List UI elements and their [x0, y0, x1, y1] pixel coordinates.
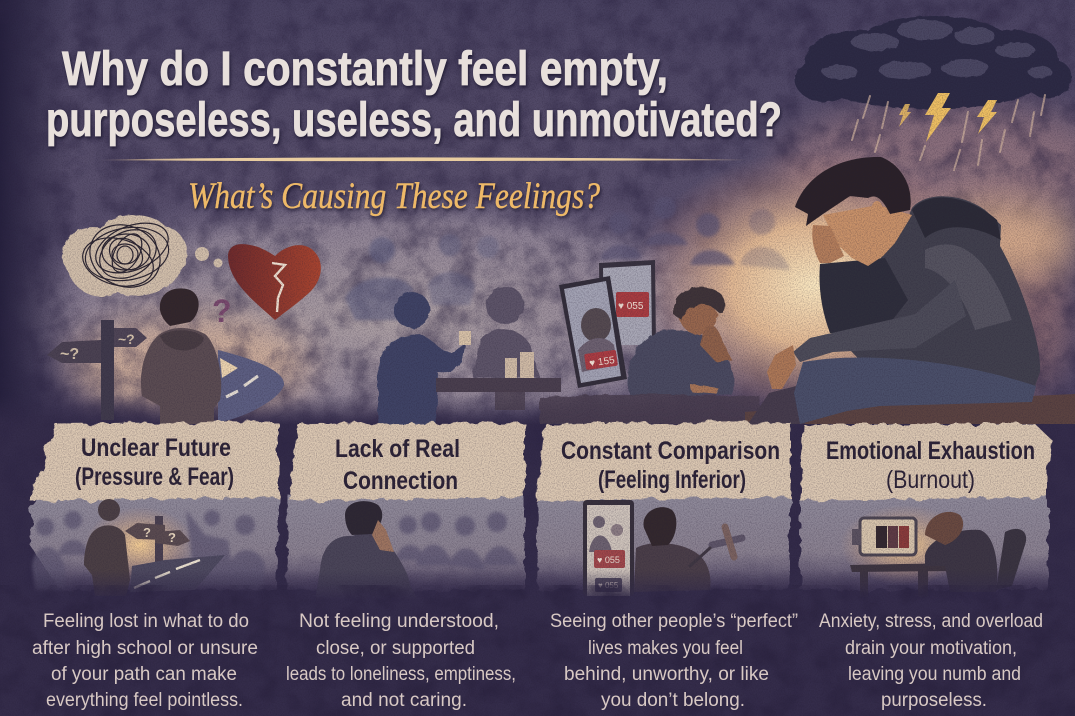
subtitle: What’s Causing These Feelings?: [188, 176, 600, 217]
panel: unclear future: [30, 422, 278, 596]
illustration: [32, 499, 265, 596]
description: emotional exhaustion: [819, 611, 1043, 711]
description: constant comparison: you don’t belong.: [601, 690, 745, 711]
panel: emotional exhaustion: [800, 424, 1052, 597]
icon: signpost: ~?: [118, 331, 135, 347]
icon: front phone: ♥ 155: [589, 355, 616, 369]
description: constant comparison: [550, 611, 798, 711]
cup: [459, 331, 471, 345]
icon: back phone: [599, 260, 656, 345]
slumped figure: [925, 512, 997, 592]
figure: woman: [472, 286, 540, 378]
heading: (Feeling Inferior): [598, 466, 746, 494]
lower arm: [793, 280, 966, 362]
icon: signpost: ~?: [60, 346, 79, 363]
heading: Unclear Future: [81, 434, 231, 462]
table: [436, 352, 561, 410]
figure: boy from behind: [141, 288, 221, 424]
chair: [996, 529, 1026, 590]
panel: comparison scene: [540, 197, 790, 424]
heading: Lack of Real: [335, 435, 460, 463]
description: unclear future: after high school or unsure: [32, 638, 258, 659]
lightning bolts: [899, 93, 997, 142]
figure: sad teen at table: [628, 287, 735, 396]
hoodie torso: [850, 196, 1040, 402]
dark band below panels: [0, 570, 1075, 716]
jeans: [794, 357, 1036, 424]
rain: [852, 95, 1045, 170]
heading: (Burnout): [886, 466, 975, 494]
description: unclear future: [32, 611, 258, 711]
panel: uncertain path scene: [47, 213, 321, 424]
description: emotional exhaustion: drain your motivation,: [845, 638, 1017, 659]
heading: [335, 435, 460, 495]
raised arm: [819, 258, 908, 336]
description: emotional exhaustion: purposeless.: [881, 690, 987, 711]
heading: [561, 437, 780, 494]
neck and face: [823, 205, 912, 266]
title: [46, 43, 782, 147]
figure: man with cup: [378, 292, 466, 425]
title: Why do I constantly feel empty,: [62, 43, 668, 96]
phone: [583, 500, 634, 596]
description: constant comparison: lives makes you feel: [588, 638, 743, 659]
card background: [287, 423, 525, 590]
description: lack of connection: and not caring.: [341, 690, 467, 711]
hood shadow: [912, 198, 1001, 240]
signpost: [125, 516, 190, 562]
ground under teen: [540, 394, 760, 424]
ear: [871, 201, 883, 221]
boot: [748, 385, 805, 424]
phone: ♥ 055: [597, 555, 620, 565]
hair: [795, 157, 911, 226]
card background: [30, 422, 278, 590]
illustration: [583, 500, 742, 596]
phone: ♥ 055: [598, 581, 619, 590]
icon: question mark: ?: [212, 293, 232, 329]
description: unclear future: Feeling lost in what to do: [43, 611, 249, 632]
shoulder highlight: [925, 244, 1012, 330]
signpost: ?: [143, 525, 151, 540]
heading: Connection: [343, 467, 458, 495]
hand on knee: [767, 345, 796, 389]
heading: Constant Comparison: [561, 437, 780, 465]
heading: (Pressure & Fear): [75, 463, 234, 491]
crossed-out icon: [690, 527, 742, 566]
description: lack of connection: leads to loneliness, emptiness,: [286, 664, 516, 685]
faded crowd: [600, 197, 790, 270]
faded silhouettes: [345, 234, 499, 320]
signpost: ?: [168, 530, 176, 545]
description: lack of connection: [286, 611, 516, 711]
illustration: [840, 505, 1026, 597]
icon: front phone: [559, 276, 627, 388]
icon: signpost: [47, 320, 147, 420]
hand on head: [812, 225, 844, 263]
panel: constant comparison: [536, 422, 790, 596]
warm glow: [630, 150, 1075, 420]
description: lack of connection: close, or supported: [316, 638, 475, 659]
figure: [634, 507, 710, 592]
description: unclear future: everything feel pointless.: [46, 690, 243, 711]
description: emotional exhaustion: Anxiety, stress, and overload: [819, 611, 1043, 632]
description: emotional exhaustion: leaving you numb and: [848, 664, 1021, 685]
bench: [745, 394, 1075, 424]
figure: [84, 499, 130, 596]
description: constant comparison: Seeing other people’s “perfect”: [550, 611, 798, 632]
description: constant comparison: behind, unworthy, or like: [564, 664, 769, 685]
cloud: [795, 16, 1072, 109]
icon: broken heart: [228, 244, 321, 320]
icon: tangled thought bubble: [62, 213, 222, 298]
panel: disconnected people scene: [345, 234, 561, 425]
card background: [536, 422, 790, 590]
heading: [826, 437, 1035, 494]
road: [218, 350, 284, 422]
description: lack of connection: Not feeling understood,: [299, 611, 499, 632]
panel: lack of real connection: [287, 423, 525, 600]
battery: [852, 518, 916, 555]
mottled texture: lower section: [0, 585, 1075, 716]
storm cloud with lightning and rain: [795, 16, 1072, 170]
figure: main sad boy with hoodie: [745, 157, 1075, 424]
heading: [75, 434, 234, 491]
divider: [100, 158, 750, 161]
illustration: [315, 501, 518, 600]
hooded person: [315, 501, 418, 600]
road: [130, 555, 225, 592]
description: unclear future: of your path can make: [51, 664, 237, 685]
title: purposeless, useless, and unmotivated?: [46, 94, 782, 147]
desk: [850, 563, 958, 597]
card background: [800, 424, 1052, 590]
icon: back phone: ♥ 055: [618, 301, 644, 312]
